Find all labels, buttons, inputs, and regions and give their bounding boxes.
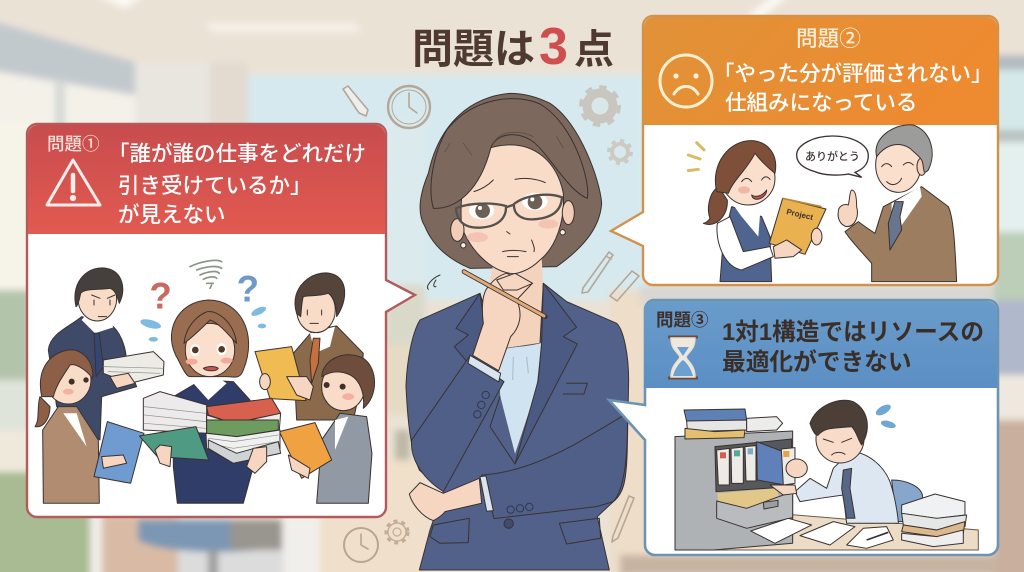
- title: [412, 18, 614, 76]
- sweat drops: [139, 317, 162, 331]
- man left: [48, 317, 137, 440]
- man head: [876, 138, 921, 192]
- speech bubble body: [27, 124, 415, 517]
- heading: 「誰が誰の仕事をどれだけ: [108, 142, 366, 166]
- icon: eraser right: [610, 271, 639, 301]
- blush: [467, 232, 488, 242]
- heading: が見えない: [118, 203, 226, 227]
- paper stack: [902, 494, 965, 518]
- worker head: [816, 415, 864, 463]
- worry marks: [427, 275, 440, 289]
- panel: problem 2: [611, 16, 998, 285]
- drawer: [717, 488, 780, 508]
- icon: clock bottom: [344, 528, 378, 562]
- woman ponytail: [703, 187, 727, 224]
- icon: gear bottom: [386, 521, 408, 543]
- book pile: [143, 392, 207, 433]
- raised sleeve: [411, 357, 504, 492]
- lower arm: [482, 413, 627, 519]
- title: 点: [574, 28, 614, 72]
- eyes: [469, 202, 494, 219]
- books on cabinet: [684, 409, 747, 422]
- woman left: [43, 407, 99, 503]
- lapels: [515, 283, 577, 464]
- jacket body: [406, 283, 629, 570]
- decorative office icons: [343, 86, 639, 562]
- cabinet: [675, 431, 793, 550]
- speech bubble body: [611, 16, 998, 285]
- central woman thinking: [406, 93, 629, 570]
- worker torso: [795, 452, 898, 523]
- ears and earrings: [451, 219, 464, 241]
- icon: clock top: [388, 86, 430, 128]
- illustration: overloaded worker: [675, 400, 978, 550]
- icon: pencil lower right: [612, 496, 634, 542]
- hair back: [420, 93, 602, 268]
- worker hands: [786, 459, 807, 478]
- title: 問題は: [412, 26, 535, 72]
- man right: [293, 326, 363, 420]
- sweat drops: [874, 402, 893, 418]
- jacket details: [430, 518, 601, 544]
- raised hand: [473, 273, 532, 371]
- accent lines: [688, 143, 704, 171]
- central woman: [173, 380, 253, 503]
- heading: 「やった分が評価されない」: [713, 62, 993, 86]
- illustration: confused team: ?: [237, 269, 259, 310]
- label: 問題③: [656, 310, 708, 330]
- brows nose mouth: [474, 178, 545, 257]
- orange book: [279, 423, 332, 478]
- header band: [644, 301, 997, 388]
- icon: small gear: [609, 141, 631, 163]
- woman vest: [720, 207, 772, 282]
- heading: 1対1構造ではリソースの: [722, 319, 984, 346]
- woman hands: [773, 240, 802, 258]
- question marks: ?: [149, 275, 172, 316]
- yellow book: [255, 347, 306, 401]
- blouse: [497, 343, 542, 455]
- folder: [769, 198, 826, 254]
- woman head: [722, 152, 775, 205]
- speech bubble body: [609, 300, 998, 555]
- header band: [28, 125, 385, 234]
- icon: hourglass: [668, 337, 698, 378]
- papers on desk: [751, 518, 812, 543]
- heading: 最適化ができない: [722, 348, 912, 376]
- paper stack: [103, 352, 164, 383]
- bubble text: ありがとう: [805, 149, 860, 163]
- icon: large gear: [582, 88, 618, 124]
- icon: sad face: [660, 55, 712, 107]
- neck: [483, 258, 547, 350]
- man jacket: [845, 187, 957, 282]
- icon: pencil right: [582, 252, 613, 293]
- header band: [644, 17, 997, 125]
- illustration: thanks: [688, 125, 957, 282]
- glasses: [456, 195, 562, 228]
- fringe: [431, 99, 588, 208]
- heading: 仕組みになっている: [725, 91, 917, 115]
- panel: problem 3: [609, 300, 998, 555]
- panel: problem 1: [27, 124, 415, 517]
- hands holding pile: [155, 445, 172, 467]
- swirl: [190, 260, 222, 288]
- folder label: Project: [786, 207, 814, 222]
- illustration: confused team: [35, 260, 375, 503]
- label: 問題②: [796, 26, 861, 51]
- woman right: [317, 413, 372, 503]
- chair: [892, 480, 923, 522]
- blue book: [94, 422, 144, 483]
- icon: pencil top left: [343, 86, 368, 116]
- cuff: [468, 355, 501, 382]
- title: 3: [539, 18, 568, 76]
- lower cuff and hand: [480, 476, 493, 511]
- desk: [697, 514, 978, 550]
- heading: 引き受けているか」: [118, 174, 312, 198]
- pencil: [464, 272, 545, 317]
- label: 問題①: [47, 134, 100, 154]
- face: [461, 145, 564, 274]
- speech bubble arigatou: [797, 136, 868, 177]
- thumb up hand: [838, 190, 857, 227]
- icon: warning triangle: [47, 160, 100, 205]
